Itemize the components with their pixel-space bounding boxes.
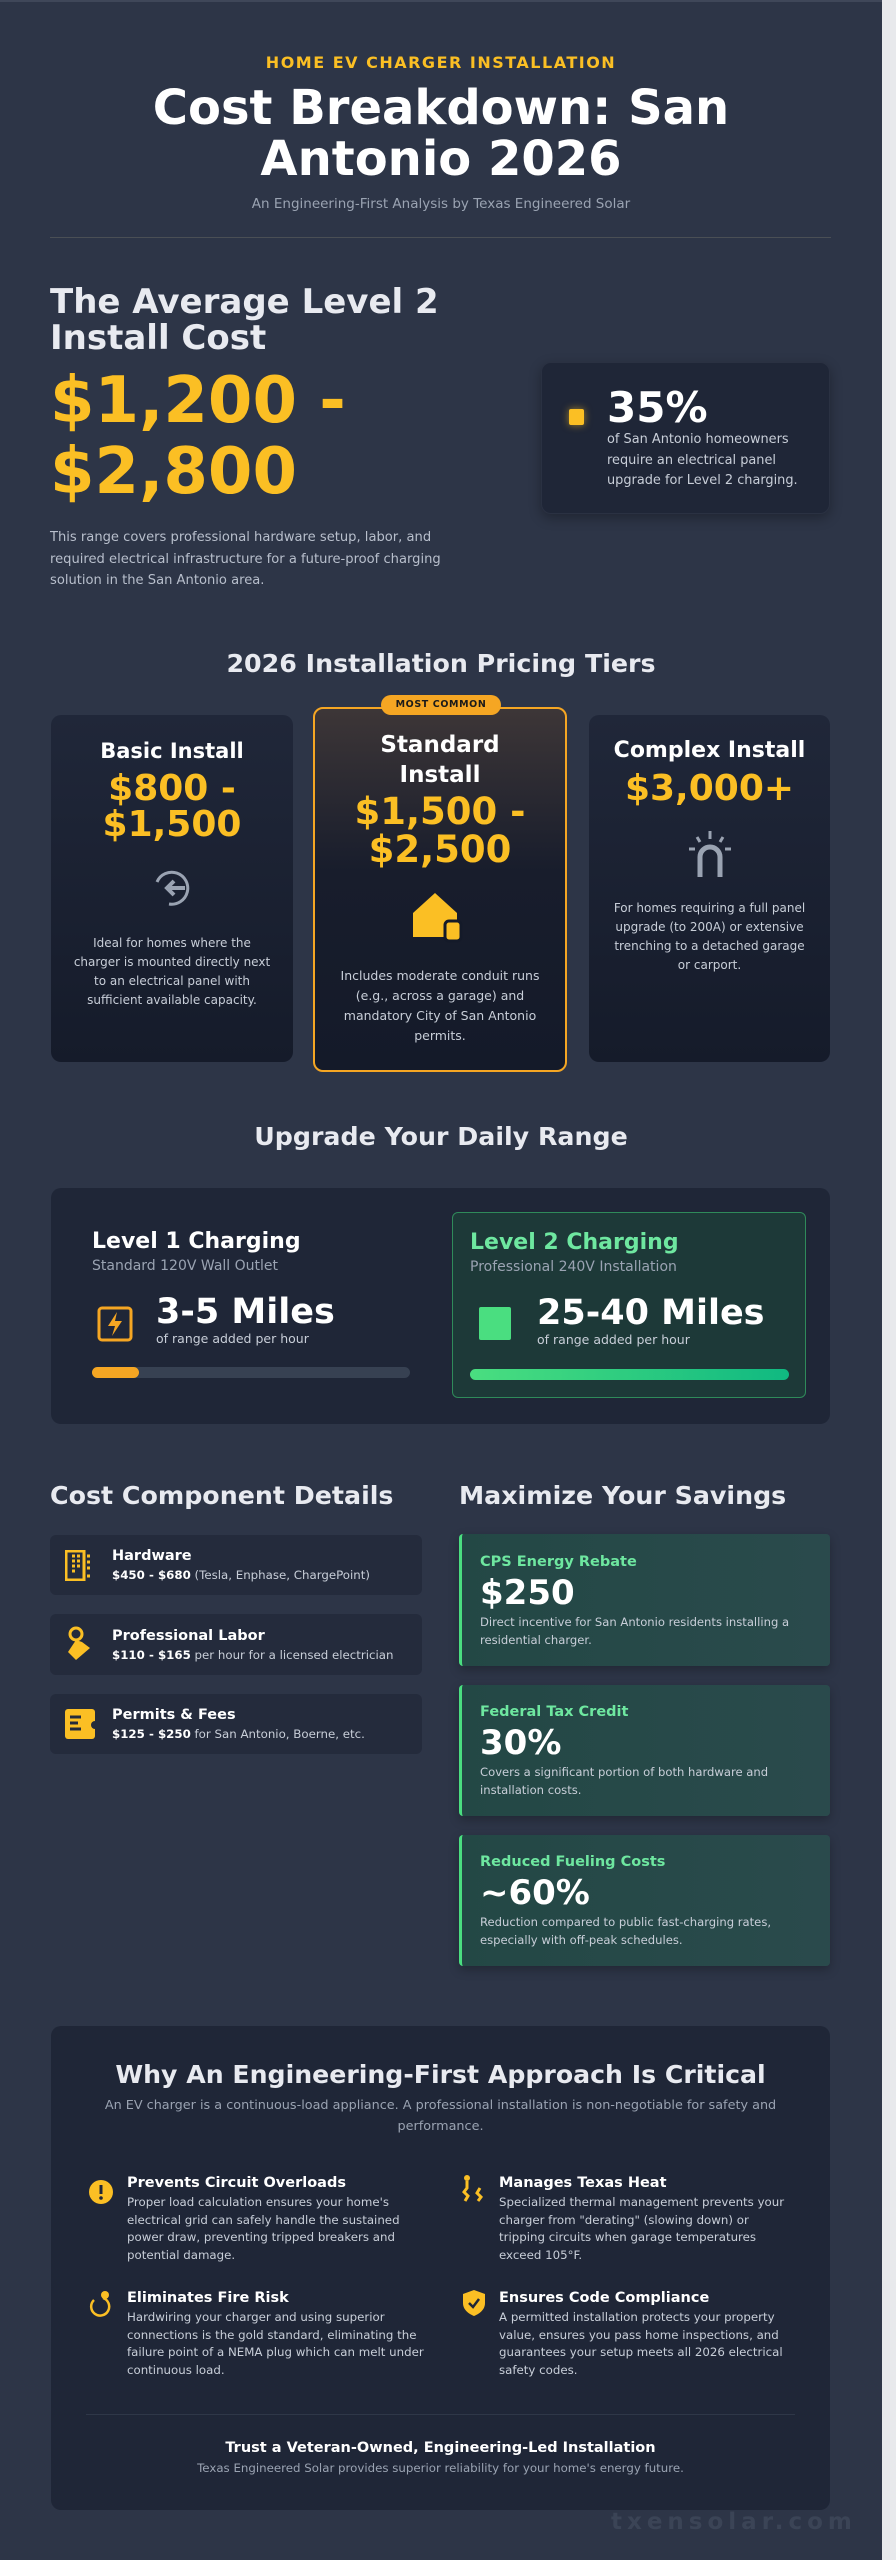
footer title: Trust a Veteran-Owned, Engineering-Led Installation — [225, 2440, 656, 2456]
level 1 — [92, 1229, 410, 1378]
footer callout — [197, 2440, 684, 2475]
stat card: 35% — [541, 362, 830, 514]
hero price: $1,200 - — [50, 364, 346, 438]
level 1 subtitle: Standard 120V Wall Outlet — [92, 1258, 278, 1274]
heading: savings: Maximize Your Savings — [459, 1481, 786, 1510]
heat text: Manages Texas Heat — [499, 2175, 667, 2191]
level 2 title: Level 2 Charging — [470, 1230, 679, 1255]
basic price: $1,500 — [103, 804, 241, 845]
icon: warning — [89, 2180, 113, 2204]
icon: shield — [463, 2290, 485, 2316]
level 2 value: 25-40 Miles — [537, 1293, 765, 1333]
subtitle: An Engineering-First Analysis by Texas Engineered Solar — [252, 196, 630, 212]
hero price: $2,800 — [50, 435, 297, 509]
icon: fire — [90, 2291, 110, 2317]
labor text: Professional Labor — [112, 1628, 265, 1644]
labor text: $110 - $165 per hour for a licensed electrician — [112, 1648, 394, 1662]
level 2 — [452, 1212, 806, 1398]
title: Antonio 2026 — [260, 131, 622, 187]
icon: trench — [689, 831, 731, 877]
hero description: This range covers professional hardware setup, labor, and required electrical infrastructure for a future-proof charging solution in the San Antonio area. — [50, 530, 441, 588]
engineering heading: Why An Engineering-First Approach Is Critical — [115, 2060, 766, 2089]
item: code compliance — [463, 2290, 783, 2377]
basic price: $800 - — [108, 768, 236, 809]
permits text — [112, 1707, 365, 1741]
panel: basic install — [51, 715, 293, 1062]
standard description: Includes moderate conduit runs (e.g., across a garage) and mandatory City of San Antonio permits. — [341, 968, 539, 1043]
heading: cost components: Cost Component Details — [50, 1481, 393, 1510]
tax text: Covers a significant portion of both hardware and installation costs. — [480, 1765, 768, 1797]
footer subtitle: Texas Engineered Solar provides superior reliability for your home's energy future. — [197, 2461, 684, 2475]
rebate title: CPS Energy Rebate — [480, 1554, 637, 1570]
component: hardware — [50, 1535, 422, 1595]
savings: fueling costs — [459, 1835, 830, 1966]
icon: hardware — [65, 1550, 90, 1581]
level 1 bar — [92, 1367, 410, 1378]
permits text: $125 - $250 for San Antonio, Boerne, etc. — [112, 1727, 365, 1741]
tax value: 30% — [480, 1723, 561, 1763]
heat text: Specialized thermal management prevents your charger from "derating" (slowing down) or tripping circuits when garage temperatures exceed 105°F. — [499, 2195, 784, 2262]
panel: range comparison — [51, 1188, 830, 1424]
rebate value: $250 — [480, 1573, 575, 1613]
panel: complex install — [589, 715, 830, 1062]
badge: most common: MOST COMMON — [396, 699, 486, 710]
badge: most common — [381, 695, 501, 715]
icon: permits — [65, 1709, 95, 1739]
fire text: Eliminates Fire Risk — [127, 2290, 289, 2306]
fueling value: ~60% — [480, 1873, 590, 1913]
hardware text: Hardware — [112, 1548, 192, 1564]
standard title: Install — [400, 762, 480, 788]
component: labor — [50, 1614, 422, 1675]
complex price: $3,000+ — [625, 768, 794, 809]
standard title: Standard — [380, 732, 500, 758]
title — [153, 80, 729, 187]
title: Cost Breakdown: San — [153, 80, 729, 136]
heading: daily range: Upgrade Your Daily Range — [254, 1122, 628, 1151]
basic title: Basic Install — [100, 739, 244, 763]
hero: average cost — [50, 282, 441, 588]
panel: standard install — [313, 707, 567, 1072]
icon: house charger — [413, 893, 460, 940]
icon: panel — [569, 409, 584, 425]
eyebrow: HOME EV CHARGER INSTALLATION — [266, 53, 616, 72]
level 1 title: Level 1 Charging — [92, 1229, 301, 1254]
labor text — [112, 1628, 394, 1662]
stat value: 35% — [607, 383, 708, 432]
complex description: For homes requiring a full panel upgrade (to 200A) or extensive trenching to a detached garage or carport. — [614, 901, 805, 972]
level 2 subtitle: Professional 240V Installation — [470, 1259, 677, 1275]
standard price: $1,500 - — [354, 790, 526, 833]
basic description: Ideal for homes where the charger is mounted directly next to an electrical panel with sufficient available capacity. — [74, 936, 270, 1007]
fire text: Hardwiring your charger and using superior connections is the gold standard, eliminating the failure point of a NEMA plug which can melt under continuous load. — [127, 2310, 424, 2377]
permits text: Permits & Fees — [112, 1707, 236, 1723]
tax title: Federal Tax Credit — [480, 1704, 628, 1720]
icon: green square — [479, 1307, 511, 1340]
standard price — [354, 790, 526, 871]
stat text: of San Antonio homeowners require an electrical panel upgrade for Level 2 charging. — [607, 432, 798, 488]
hero price — [50, 364, 346, 509]
savings: cps rebate — [459, 1534, 830, 1666]
standard price: $2,500 — [369, 828, 511, 871]
standard title — [380, 732, 500, 788]
basic price — [103, 768, 241, 845]
rebate text: Direct incentive for San Antonio residents installing a residential charger. — [480, 1615, 789, 1647]
hero heading — [50, 282, 439, 358]
compliance text: Ensures Code Compliance — [499, 2290, 709, 2306]
icon: labor — [68, 1626, 90, 1660]
hero heading: Install Cost — [50, 318, 266, 358]
fueling text: Reduction compared to public fast-charging rates, especially with off-peak schedules. — [480, 1915, 771, 1947]
savings: federal tax credit — [459, 1685, 830, 1816]
item: circuit overloads — [89, 2175, 400, 2262]
hero heading: The Average Level 2 — [50, 282, 439, 322]
item: fire risk — [90, 2290, 424, 2377]
level 2 caption: of range added per hour — [537, 1332, 690, 1347]
engineering intro: An EV charger is a continuous-load appliance. A professional installation is non-negotiable for safety and performance. — [105, 2098, 776, 2134]
fueling title: Reduced Fueling Costs — [480, 1854, 665, 1870]
overloads text: Proper load calculation ensures your home's electrical grid can safely handle the sustained power draw, preventing tripped breakers and potential damage. — [127, 2195, 400, 2262]
compliance text: A permitted installation protects your property value, ensures you pass home inspections, and guarantees your setup meets all 2026 electrical safety codes. — [499, 2310, 783, 2377]
level 1 value: 3-5 Miles — [156, 1292, 335, 1332]
icon: plug arrow — [156, 870, 190, 906]
overloads text: Prevents Circuit Overloads — [127, 2175, 346, 2191]
item: texas heat — [462, 2175, 784, 2262]
complex title: Complex Install — [614, 738, 805, 763]
hardware text: $450 - $680 (Tesla, Enphase, ChargePoint) — [112, 1568, 370, 1582]
hardware text — [112, 1548, 370, 1582]
level 1 caption: of range added per hour — [156, 1331, 309, 1346]
level 2 bar — [470, 1369, 789, 1380]
component: permits — [50, 1694, 422, 1754]
heading: pricing tiers: 2026 Installation Pricing Tiers — [226, 649, 656, 678]
icon: heat — [462, 2175, 483, 2202]
icon: bolt — [98, 1306, 132, 1342]
watermark: txensolar.com — [611, 2509, 857, 2535]
panel: engineering-first — [51, 2026, 830, 2510]
